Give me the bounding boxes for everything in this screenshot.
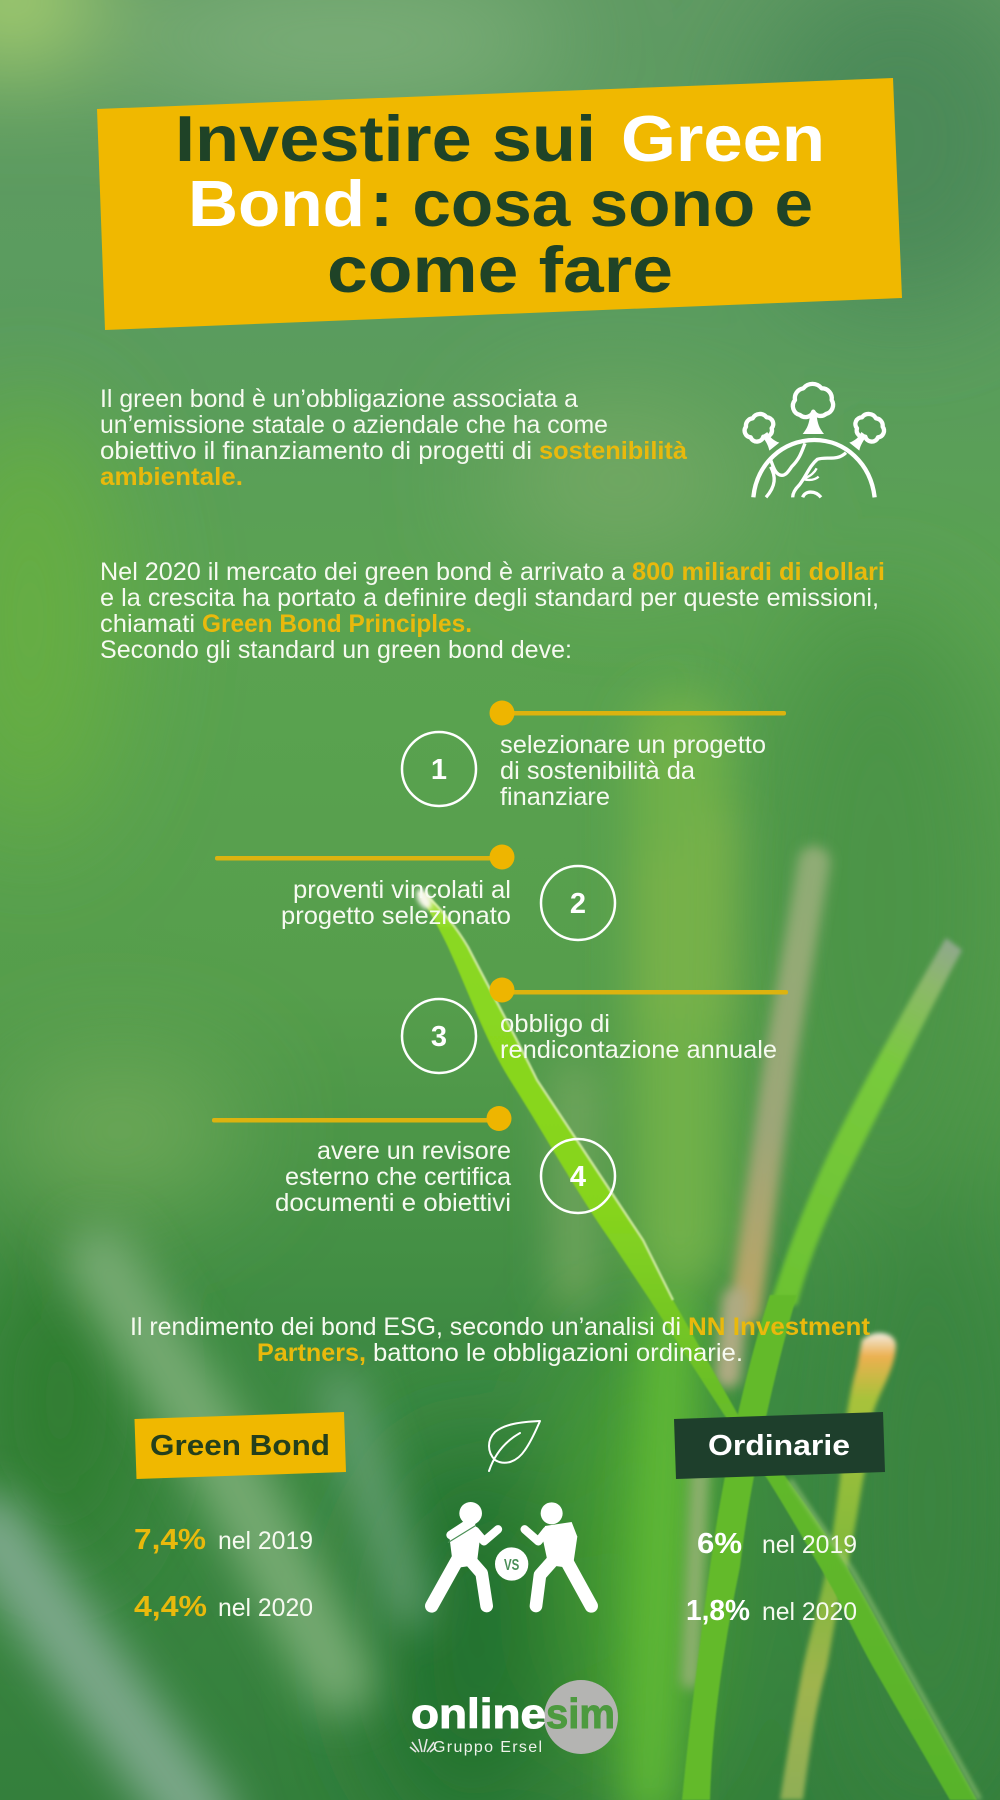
stat: green bond 2020: nel 2020 — [218, 1594, 313, 1622]
market paragraph: Nel 2020 il mercato dei green bond è arrivato a — [100, 558, 625, 586]
stat: ordinarie 2019: 6% — [697, 1528, 742, 1560]
step 4: 4 — [570, 1161, 586, 1193]
icon: leaf — [489, 1421, 540, 1471]
title banner: Investire sui — [175, 102, 596, 175]
market paragraph: Secondo gli standard un green bond deve: — [100, 636, 572, 664]
step 3: rendicontazione annuale — [500, 1036, 777, 1064]
label: Ordinarie — [674, 1412, 885, 1479]
step 3 — [402, 978, 788, 1073]
title banner — [97, 78, 902, 330]
stat: ordinarie 2020: nel 2020 — [762, 1598, 857, 1626]
step 2 — [215, 844, 615, 940]
intro paragraph: un’emissione statale o aziendale che ha come — [100, 411, 608, 439]
label: Green Bond — [134, 1412, 346, 1479]
market paragraph: chiamati — [100, 610, 195, 638]
grass blade: main sharp — [418, 893, 977, 1800]
stat: ordinarie 2020: 1,8% — [686, 1595, 750, 1627]
grass blade: thin with orange tip — [780, 1333, 896, 1800]
stat: green bond 2019 — [134, 1524, 313, 1556]
returns paragraph: Partners, — [257, 1339, 366, 1367]
label: Ordinarie: Ordinarie — [708, 1430, 850, 1462]
label: Green Bond: Green Bond — [150, 1430, 330, 1462]
step 3: obbligo di — [500, 1010, 610, 1038]
title banner: Bond — [188, 167, 365, 240]
step 4: documenti e obiettivi — [275, 1189, 511, 1217]
step 2: proventi vincolati al — [293, 876, 511, 904]
step 3: 3 — [431, 1021, 447, 1053]
logo: onlinesim Gruppo Ersel: Gruppo Ersel — [433, 1739, 542, 1756]
step 1: selezionare un progetto — [500, 731, 766, 759]
stat: green bond 2019: nel 2019 — [218, 1527, 313, 1555]
market paragraph: Green Bond Principles. — [202, 610, 472, 638]
market paragraph: e la crescita ha portato a definire degli standard per queste emissioni, — [100, 584, 879, 612]
stat: ordinarie 2020 — [686, 1595, 857, 1627]
intro paragraph — [100, 385, 687, 491]
grass blade: wide vertical — [682, 1295, 797, 1800]
step 4: esterno che certifica — [285, 1163, 511, 1191]
stat: green bond 2020: 4,4% — [134, 1591, 207, 1623]
step 4 — [212, 1106, 615, 1217]
intro paragraph: obiettivo il finanziamento di progetti di — [100, 437, 532, 465]
icon: two fighters versus: VS — [504, 1557, 519, 1574]
step 1: finanziare — [500, 783, 610, 811]
logo: onlinesim Gruppo Ersel — [410, 1680, 618, 1756]
intro paragraph: ambientale. — [100, 463, 243, 491]
logo: onlinesim Gruppo Ersel: sim — [546, 1690, 615, 1737]
stat: ordinarie 2019 — [697, 1528, 857, 1560]
market paragraph: 800 miliardi di dollari — [632, 558, 885, 586]
step 2: 2 — [570, 888, 586, 920]
title banner: come fare — [327, 233, 673, 306]
grass blade: blurred right — [770, 938, 962, 1305]
icon: two fighters versus — [432, 1502, 591, 1606]
icon: earth with trees — [745, 384, 884, 497]
step 1 — [402, 700, 786, 811]
logo: onlinesim Gruppo Ersel: online — [411, 1690, 546, 1737]
stat: ordinarie 2019: nel 2019 — [762, 1531, 857, 1559]
returns paragraph: NN Investment — [688, 1313, 871, 1341]
intro paragraph: sostenibilità — [539, 437, 687, 465]
returns paragraph — [130, 1313, 871, 1367]
stat: green bond 2019: 7,4% — [134, 1524, 206, 1556]
step 1: di sostenibilità da — [500, 757, 695, 785]
intro paragraph: Il green bond è un’obbligazione associata a — [100, 385, 578, 413]
market paragraph — [100, 558, 885, 664]
stat: green bond 2020 — [134, 1591, 313, 1623]
returns paragraph: battono le obbligazioni ordinarie. — [373, 1339, 743, 1367]
returns paragraph: Il rendimento dei bond ESG, secondo un’analisi di — [130, 1313, 681, 1341]
title banner: : cosa sono e — [370, 167, 813, 240]
step 2: progetto selezionato — [281, 902, 511, 930]
title banner: Green — [621, 102, 825, 175]
step 4: avere un revisore — [317, 1137, 511, 1165]
step 1: 1 — [431, 754, 447, 786]
